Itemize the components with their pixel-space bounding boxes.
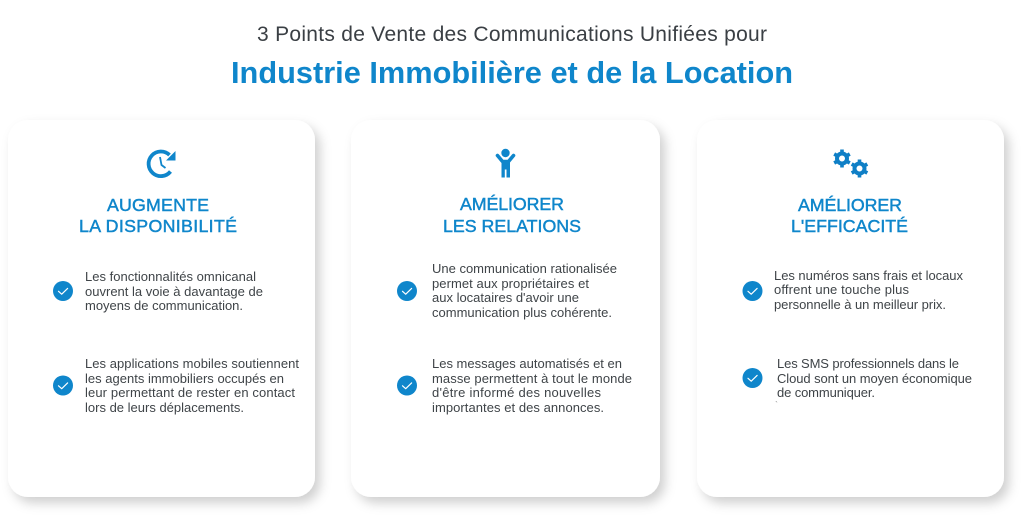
heading: L'EFFICACITÉ [791, 216, 908, 236]
text block: Cloud sont un moyen économique [777, 371, 972, 386]
text block [432, 356, 632, 415]
text block [432, 261, 617, 320]
text block: Une communication rationalisée [432, 261, 617, 276]
icon: check [742, 368, 762, 388]
icon: gears [834, 150, 867, 178]
text block: permet aux propriétaires et [432, 276, 589, 291]
text block: masse permettent à tout le monde [432, 371, 632, 386]
text block: ` [775, 400, 778, 410]
heading: AMÉLIORER [460, 194, 564, 214]
card background [351, 120, 660, 497]
text block [85, 356, 299, 415]
text block: ouvrent la voie à davantage de [85, 284, 263, 299]
text block: lors de leurs déplacements. [85, 400, 244, 415]
text block: moyens de communication. [85, 298, 243, 313]
text block: Les numéros sans frais et locaux [774, 268, 964, 283]
text block: aux locataires d'avoir une [432, 290, 579, 305]
heading [443, 194, 581, 236]
text block [85, 269, 263, 313]
panel: efficacité [697, 120, 1004, 497]
text block: Les messages automatisés et en [432, 356, 622, 371]
icon: check [53, 281, 73, 301]
text block: de communiquer. [777, 385, 875, 400]
icon: check [742, 281, 762, 301]
text block: Les SMS professionnels dans le [777, 356, 959, 371]
text block: personnelle à un meilleur prix. [774, 297, 946, 312]
main heading: Industrie Immobilière et de la Location [231, 55, 793, 90]
heading: AUGMENTE [107, 195, 209, 215]
heading [791, 195, 908, 236]
card background [697, 120, 1004, 497]
panel: disponibilité [8, 120, 315, 497]
heading: LES RELATIONS [443, 216, 581, 236]
text block: les agents immobiliers occupés en [85, 371, 284, 386]
panel: relations [351, 120, 660, 497]
card background [8, 120, 315, 497]
text block: offrent une touche plus [774, 282, 910, 297]
icon: person with raised arms [498, 149, 514, 178]
heading: AMÉLIORER [798, 195, 902, 215]
heading: LA DISPONIBILITÉ [79, 216, 237, 236]
text block: communication plus cohérente. [432, 305, 612, 320]
text block: Les fonctionnalités omnicanal [85, 269, 256, 284]
text block: Les applications mobiles soutiennent [85, 356, 299, 371]
text block: leur permettant de rester en contact [85, 385, 295, 400]
text block: importantes et des annonces. [432, 400, 604, 415]
heading [79, 195, 237, 236]
text block: d'être informé des nouvelles [432, 385, 602, 400]
icon: check [53, 376, 73, 396]
text block [775, 356, 972, 410]
icon: check [397, 281, 417, 301]
icon: check [397, 376, 417, 396]
subtitle line: 3 Points de Vente des Communications Unifiées pour [257, 23, 767, 46]
text block [774, 268, 964, 312]
icon: clock with arrow [149, 151, 176, 176]
title [231, 23, 793, 90]
